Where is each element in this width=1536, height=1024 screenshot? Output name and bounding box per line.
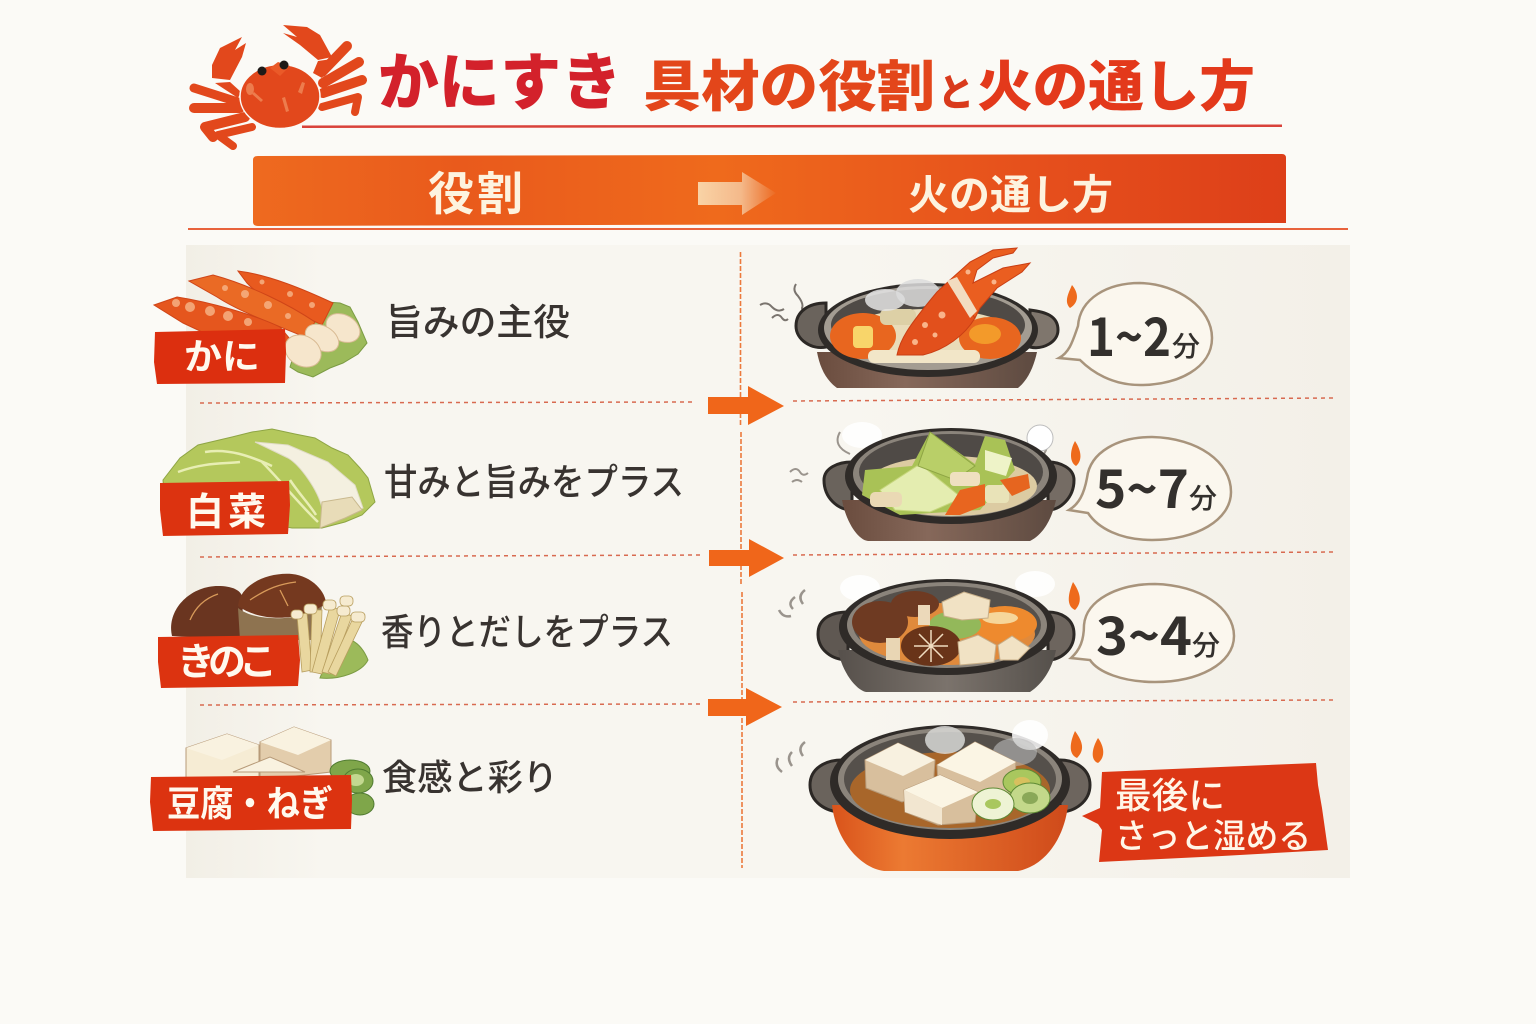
arrow: row 1 to 2 xyxy=(708,386,784,425)
row 3: mushroom ingredient xyxy=(158,574,673,688)
title underline xyxy=(302,124,1282,128)
time bubble: 1~2 xyxy=(1087,296,1171,371)
flame xyxy=(1069,582,1080,610)
claw xyxy=(897,280,975,355)
steam squiggles xyxy=(760,284,807,320)
green onion xyxy=(1003,769,1041,795)
title: subtitle part one: 具材の役割 xyxy=(643,56,935,118)
role text: crab: 旨みの主役 xyxy=(386,302,570,343)
header label: role: 役割 xyxy=(428,168,523,220)
steam xyxy=(779,590,805,616)
flames xyxy=(1071,731,1103,763)
time bubble: 分 xyxy=(1172,325,1200,365)
callout: final warm: 最後に xyxy=(1115,775,1225,816)
time bubble: 分 xyxy=(1189,477,1217,517)
icon: mushrooms and enoki xyxy=(171,574,368,678)
label: mushroom: きのこ xyxy=(177,642,277,684)
label: cabbage xyxy=(160,481,290,536)
flame xyxy=(1071,441,1080,466)
title: particle: と xyxy=(938,73,974,115)
role text: tofu: 食感と彩り xyxy=(382,757,558,798)
icon: tofu and green onion xyxy=(186,727,374,815)
label: mushroom xyxy=(158,635,300,688)
arrow: header xyxy=(698,172,776,215)
header label: heating: 火の通し方 xyxy=(908,172,1113,218)
pot 3: mushrooms and tofu xyxy=(779,571,1234,692)
time bubble: 5~7 xyxy=(1095,448,1189,523)
role text: cabbage: 甘みと旨みをプラス xyxy=(384,462,684,503)
title block xyxy=(194,25,1282,146)
tofu cubes xyxy=(865,743,935,802)
pot 4: tofu finish xyxy=(777,720,1328,871)
time bubble xyxy=(1059,283,1212,385)
soup ingredients xyxy=(973,606,1037,642)
time bubble: 分 xyxy=(1192,624,1220,664)
row 2: cabbage ingredient xyxy=(160,429,684,536)
pot 2: napa cabbage xyxy=(790,422,1231,541)
label: crab: かに xyxy=(184,336,260,377)
row 1: crab ingredient xyxy=(154,271,570,384)
label: tofu and green onion: 豆腐・ねぎ xyxy=(167,783,333,824)
callout: final warm xyxy=(1082,763,1328,862)
time bubble xyxy=(1069,437,1231,540)
header bar xyxy=(253,154,1286,226)
steam xyxy=(790,432,1048,482)
time bubble xyxy=(1071,584,1234,682)
icon: crab xyxy=(194,25,362,146)
icon: crab legs on lettuce xyxy=(154,271,367,377)
title: main: かにすき xyxy=(378,49,622,118)
row 4: tofu and leek ingredient xyxy=(150,727,558,831)
time bubble: 3~4 xyxy=(1096,595,1192,670)
label: crab xyxy=(154,329,286,384)
panel: table xyxy=(186,245,1350,878)
steam xyxy=(777,742,805,772)
arrow: row 3 to 4 xyxy=(708,688,782,726)
flame xyxy=(1067,285,1077,308)
callout: final warm: さっと湿める xyxy=(1115,818,1311,856)
cabbage and vegetables xyxy=(862,432,1015,515)
label: cabbage: 白菜 xyxy=(186,492,266,534)
icon: napa cabbage xyxy=(163,429,375,528)
label: tofu and green onion xyxy=(150,775,352,831)
arrow: row 2 to 3 xyxy=(709,539,784,577)
title: subtitle part two: 火の通し方 xyxy=(977,56,1255,118)
role text: mushroom: 香りとだしをプラス xyxy=(381,612,673,653)
soup ingredients xyxy=(830,313,896,359)
pot 1: crab claw xyxy=(760,248,1212,388)
